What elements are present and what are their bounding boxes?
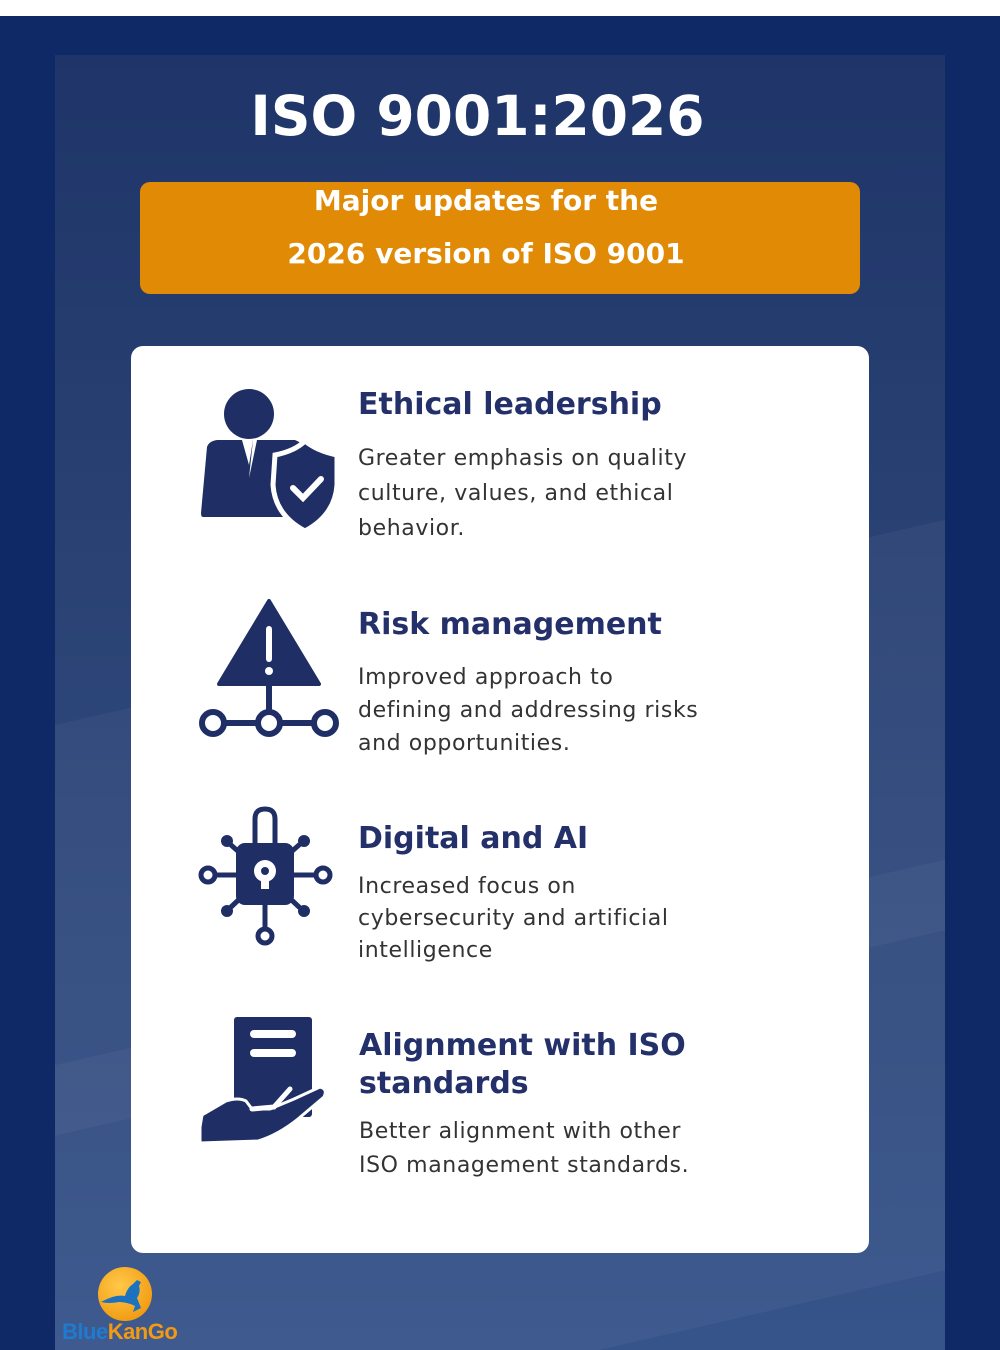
text: digital: intelligence	[358, 938, 493, 963]
text: ethical: culture, values, and ethical	[358, 481, 673, 506]
text: risk	[358, 665, 698, 756]
subtitle banner	[140, 182, 860, 294]
icon: hand holding document	[202, 1017, 324, 1142]
icon: digital lock	[198, 806, 332, 946]
heading: alignment: standards	[359, 1066, 529, 1101]
heading: risk management: Risk management	[358, 607, 662, 642]
icon: kangaroo circle	[98, 1267, 152, 1321]
text: digital: cybersecurity and artificial	[358, 906, 669, 931]
text: risk: and opportunities.	[358, 731, 570, 756]
text: alignment: ISO management standards.	[359, 1153, 689, 1178]
heading: alignment	[359, 1028, 686, 1101]
text: ethical: Greater emphasis on quality	[358, 446, 687, 471]
text: ethical	[358, 446, 687, 541]
heading: ethical leadership: Ethical leadership	[358, 387, 662, 422]
text: risk: Improved approach to	[358, 665, 613, 690]
text: digital	[358, 874, 669, 963]
title: ISO 9001:2026	[250, 84, 705, 148]
text: risk: defining and addressing risks	[358, 698, 698, 723]
icon: risk warning network	[199, 598, 339, 737]
text: digital: Increased focus on	[358, 874, 576, 899]
text: alignment: Better alignment with other	[359, 1119, 681, 1144]
subtitle banner: 2026 version of ISO 9001	[287, 237, 685, 270]
icon: leader with shield	[201, 389, 335, 528]
text: alignment	[359, 1119, 689, 1178]
logo: BlueKanGo	[62, 1267, 177, 1344]
text: ethical: behavior.	[358, 516, 465, 541]
panel: updates card	[131, 346, 869, 1253]
subtitle banner: Major updates for the	[314, 184, 658, 217]
heading: alignment: Alignment with ISO	[359, 1028, 686, 1063]
text: brand name: BlueKanGo	[62, 1319, 177, 1344]
heading: digital and AI: Digital and AI	[358, 821, 588, 856]
